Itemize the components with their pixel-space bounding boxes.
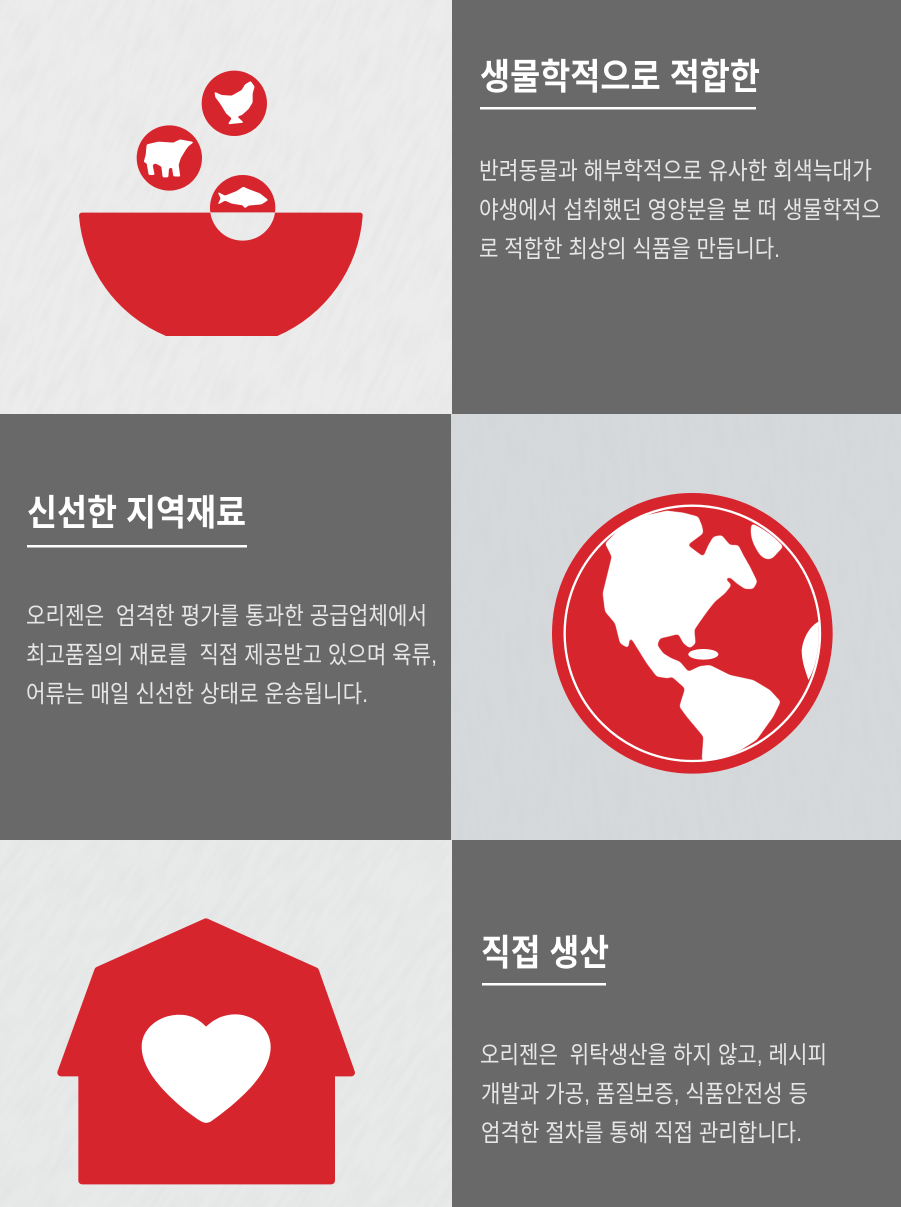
icon: heart [142, 1014, 271, 1123]
text block: direct production description: 엄격한 절차를 통해 직접 관리합니다. [481, 1120, 802, 1147]
icon: caribbean island [688, 649, 718, 660]
icon: globe [552, 493, 833, 774]
text block: direct production description: 개발과 가공, 품질보증, 식품안전성 등 [481, 1081, 808, 1108]
heading: direct production: 직접 생산 [481, 932, 609, 973]
text block: biologically appropriate description: 로 적합한 최상의 식품을 만듭니다. [479, 236, 780, 263]
text block: fresh regional ingredients description [26, 603, 437, 708]
icon: fish circle [210, 175, 275, 212]
panel: fresh ingredients text background [0, 414, 451, 840]
text block: biologically appropriate description [479, 158, 881, 263]
panel: biological text background [452, 0, 901, 414]
icon: barn with heart [61, 922, 351, 1181]
icon: greenland [751, 523, 783, 559]
text block: fresh regional ingredients description: 최고품질의 재료를 직접 제공받고 있으며 육류, [26, 642, 437, 669]
panel: direct production text background [452, 840, 901, 1207]
panel: bowl background [0, 0, 452, 414]
text block: direct production description [480, 1042, 827, 1147]
icon: americas landmass [603, 511, 781, 761]
text block: fresh regional ingredients description: 오리젠은 엄격한 평가를 통과한 공급업체에서 [26, 603, 427, 630]
icon: barn [61, 922, 351, 1181]
heading: fresh regional ingredients: 신선한 지역재료 [27, 492, 246, 533]
icon: bowl with falling ingredients [79, 71, 363, 336]
text block: fresh regional ingredients description: 어류는 매일 신선한 상태로 운송됩니다. [26, 681, 368, 708]
heading: biologically appropriate: 생물학적으로 적합한 [480, 56, 760, 97]
panel: globe background [451, 414, 901, 840]
icon: chicken circle [202, 71, 267, 136]
icon: bowl [79, 213, 363, 336]
panel: barn background [0, 840, 452, 1207]
icon: cow circle [137, 125, 202, 191]
icon: africa edge [802, 622, 819, 680]
text block: direct production description: 오리젠은 위탁생산을 하지 않고, 레시피 [480, 1042, 827, 1069]
